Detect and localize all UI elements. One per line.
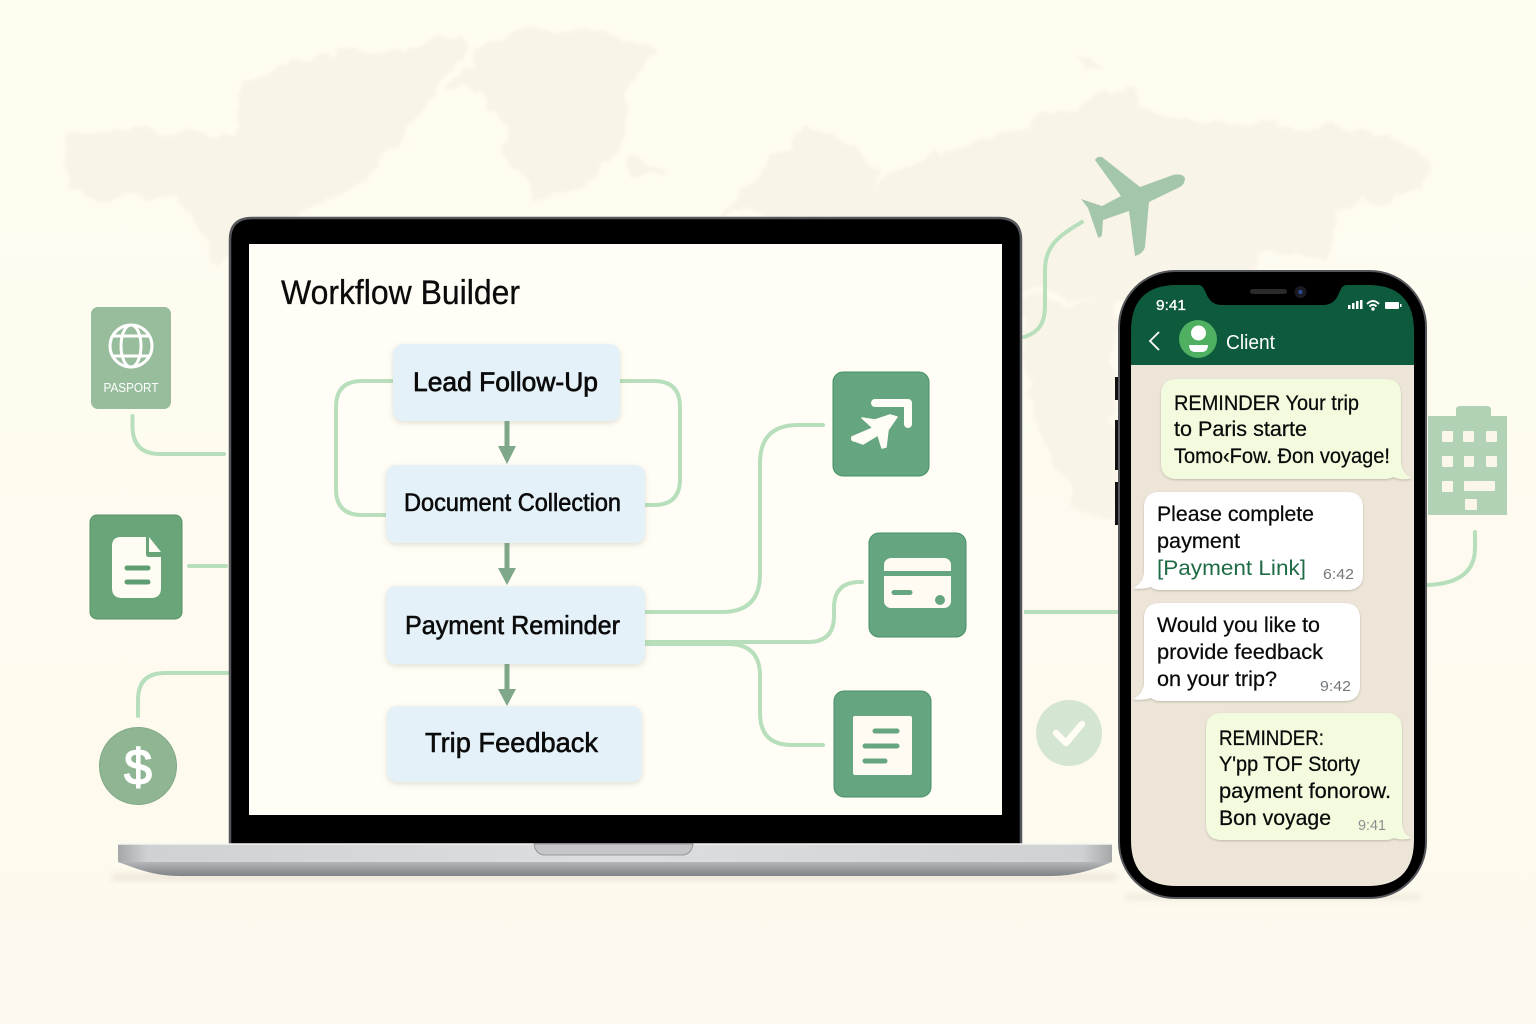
flow box: Lead Follow-Up: Lead Follow-Up xyxy=(413,367,598,397)
phone body xyxy=(1119,271,1426,898)
arrow: payment to feedback xyxy=(498,664,516,706)
message: payment: 6:42 xyxy=(1323,567,1354,583)
icon: dollar coin xyxy=(100,728,176,804)
message: payment: Please complete xyxy=(1157,502,1314,526)
arrow: lead to document xyxy=(498,421,516,464)
chat header xyxy=(1131,285,1414,365)
message: feedback: on your trip? xyxy=(1157,667,1277,691)
flow box: Trip Feedback xyxy=(387,706,642,782)
world map background xyxy=(65,30,1435,520)
connector: payment to laptop xyxy=(138,673,228,716)
message: trip reminder xyxy=(1161,379,1412,479)
message: payment: [Payment Link] xyxy=(1157,556,1306,580)
icon: flight xyxy=(833,372,929,476)
connector: payment reminder to document icon xyxy=(645,644,823,745)
flow box: Trip Feedback: Trip Feedback xyxy=(425,727,599,758)
flow box: Payment Reminder: Payment Reminder xyxy=(405,610,620,640)
laptop base xyxy=(118,844,1112,876)
flow box: Document Collection xyxy=(386,465,645,543)
laptop xyxy=(112,218,1117,879)
message: payment xyxy=(1133,492,1363,590)
loop connector: right xyxy=(620,381,680,505)
speaker xyxy=(1250,289,1287,294)
connector: payment reminder to flight icon xyxy=(645,425,823,612)
arrow: document to payment xyxy=(498,543,516,585)
icon: passport: PASPORT xyxy=(104,381,159,395)
contact name: Client xyxy=(1226,332,1275,354)
message: trip reminder: REMINDER Your trip xyxy=(1174,391,1359,415)
icon: passport xyxy=(91,307,171,409)
message: payment reminder xyxy=(1206,713,1412,840)
message: feedback: provide feedback xyxy=(1157,640,1323,664)
message: payment reminder: Bon voyage xyxy=(1219,806,1331,830)
phone shadow xyxy=(1125,895,1420,899)
connector: passport to laptop xyxy=(132,416,224,454)
icon: dollar coin: $ xyxy=(124,739,152,795)
connector: document to laptop xyxy=(189,564,226,568)
icon: check badge xyxy=(1036,700,1102,766)
laptop lid xyxy=(230,218,1021,845)
icon: hotel building xyxy=(1428,406,1507,515)
signal icon xyxy=(1348,300,1362,309)
connector: payment reminder to card icon xyxy=(645,582,862,642)
message: payment reminder: payment fonorow. xyxy=(1219,779,1391,803)
back chevron xyxy=(1150,332,1159,350)
flow box: Lead Follow-Up xyxy=(393,344,620,421)
chat background xyxy=(1131,365,1414,886)
message: payment reminder: REMINDER: xyxy=(1219,726,1324,750)
message: trip reminder: Tomo‹Fow. Ðon voyage! xyxy=(1174,444,1390,468)
phone xyxy=(1117,271,1426,899)
title: Workflow Builder xyxy=(281,274,520,312)
connector: laptop to phone xyxy=(1024,610,1118,614)
message: feedback xyxy=(1133,603,1360,701)
flow box: Payment Reminder xyxy=(386,586,645,664)
connector: phone to hotel xyxy=(1428,532,1475,585)
phone side buttons xyxy=(1115,377,1119,525)
battery icon xyxy=(1385,302,1402,309)
message: payment reminder: Y'pp TOF Storty xyxy=(1219,752,1360,776)
icon: document xyxy=(90,515,182,619)
connector: laptop to airplane xyxy=(1024,222,1082,337)
message: trip reminder: to Paris starte xyxy=(1174,417,1307,441)
icon: credit card xyxy=(869,533,966,637)
status time: 9:41 xyxy=(1156,297,1186,314)
message: feedback: Would you like to xyxy=(1157,613,1320,637)
message: payment: payment xyxy=(1157,529,1240,553)
avatar xyxy=(1179,320,1217,358)
icon: airplane xyxy=(1081,157,1185,256)
icon: notes xyxy=(834,691,931,797)
flow box: Document Collection: Document Collection xyxy=(404,489,621,517)
laptop base shadow xyxy=(112,875,1117,879)
laptop screen xyxy=(249,244,1002,815)
loop connector: left xyxy=(336,381,393,515)
message: payment reminder: 9:41 xyxy=(1358,818,1386,834)
wifi icon xyxy=(1367,301,1379,310)
message: feedback: 9:42 xyxy=(1320,679,1351,695)
camera xyxy=(1294,286,1306,298)
